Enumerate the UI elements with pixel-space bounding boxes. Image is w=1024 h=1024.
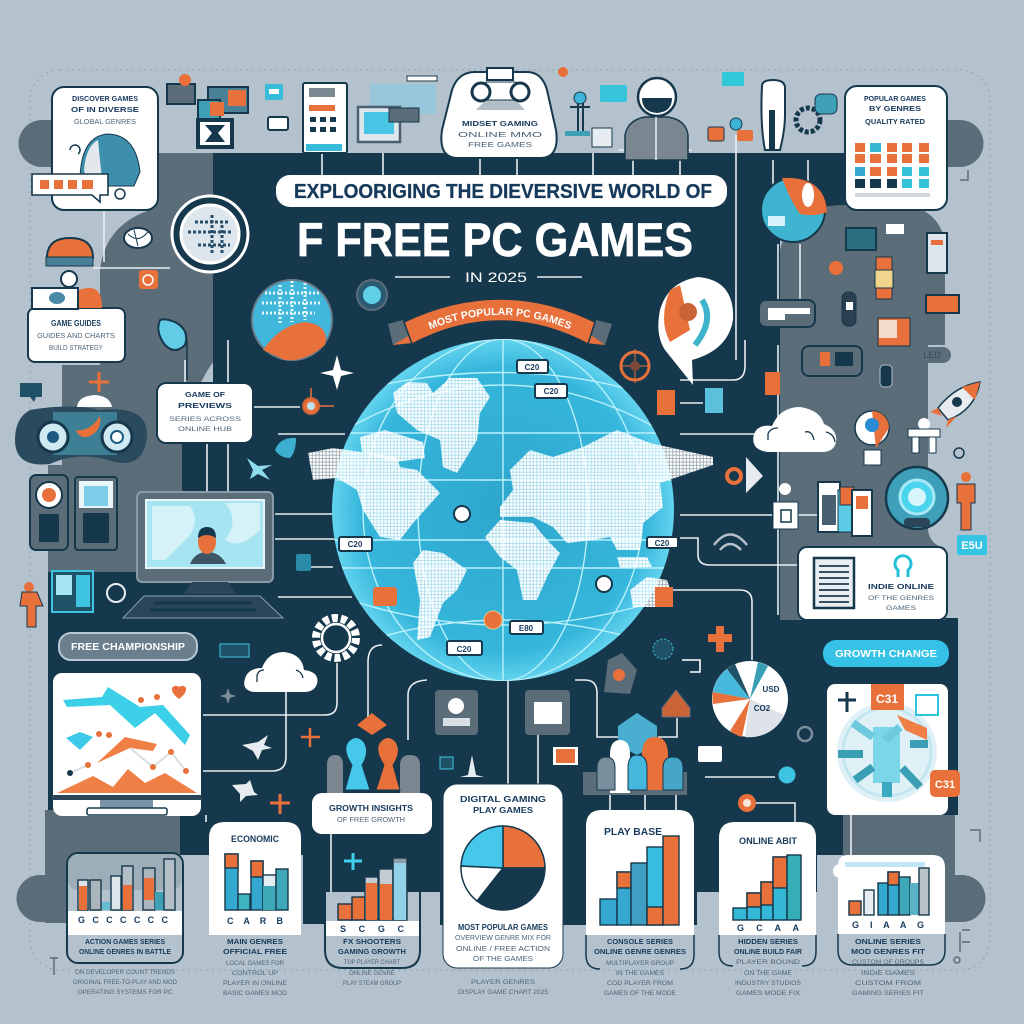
panel: bar chart 2: ECONOMIC	[231, 834, 279, 844]
caption 3	[343, 970, 401, 987]
panel: genre grid card	[845, 86, 947, 210]
panel: genre grid card: BY GENRES	[869, 104, 921, 113]
icon: wifi	[714, 534, 747, 550]
panel: bar chart 2: MAIN GENRES	[227, 937, 283, 946]
heading: free championship	[59, 633, 197, 660]
icon: gamepad	[472, 68, 529, 110]
callout: growth insights	[312, 793, 432, 834]
caption 4	[458, 979, 548, 996]
panel: online share chart: HIDDEN SERIES	[738, 937, 798, 946]
caption 5	[604, 970, 677, 997]
pie chart: right: CO2	[754, 704, 771, 713]
icon: cyan badge top	[265, 84, 283, 100]
heading: free championship: FREE CHAMPIONSHIP	[71, 642, 185, 653]
icon: user with orange shape	[32, 271, 102, 309]
caption 3: PLAY STEAM GROUP	[343, 980, 401, 987]
icon: small pin	[880, 365, 892, 387]
icon: cyan ring	[778, 766, 796, 784]
title banner: EXPLOORIGING THE DIEVERSIVE WORLD OF	[294, 181, 712, 203]
caption 6: GAMES MODE FIX	[736, 990, 801, 997]
caption 5: IN THE GAMES	[616, 970, 665, 977]
map markers: C20	[544, 387, 559, 396]
badge: cyan label	[957, 535, 987, 555]
caption 6: ON THE GAME	[744, 970, 793, 977]
globe with world map	[308, 339, 713, 681]
connector lines	[93, 135, 851, 892]
icon: right slate cluster	[829, 224, 959, 363]
panel: pie chart card: OVERVIEW GENRE MIX FOR	[455, 935, 551, 942]
panel: player base chart: ONLINE GENRE GENRES	[594, 947, 686, 956]
caption 7: CUSTOM FROM	[855, 980, 921, 987]
panel: bar chart 3: S C G C	[340, 924, 404, 934]
chart: growth radial card: C31	[876, 692, 898, 706]
pie chart: right: USD	[763, 685, 780, 694]
panel: game guides card: GAME GUIDES	[51, 319, 102, 328]
icon: standing figure	[957, 472, 975, 530]
icon: speaker cone	[727, 457, 763, 493]
icon: dark tag	[20, 383, 42, 402]
icon: right pie circle	[761, 178, 827, 242]
icon: rocket	[930, 382, 980, 428]
map markers: E80	[519, 624, 534, 633]
icon: magnifier lens	[172, 196, 248, 272]
panel: document card	[798, 547, 947, 620]
panel: chart 7: CUSTOM OF GROUPS	[852, 959, 925, 966]
icon: mini globe	[252, 280, 332, 360]
icon: gear and chat	[796, 94, 837, 132]
panel: bar chart 2	[209, 822, 301, 963]
chart: growth radial card	[827, 684, 960, 815]
icon: plane white 2	[232, 780, 258, 802]
panel: pie chart card: PLAY GAMES	[473, 806, 534, 815]
panel: player base chart: PLAY BASE	[604, 827, 662, 838]
panel: controller badge: FREE GAMES	[468, 142, 532, 149]
panel: bar chart 3	[325, 858, 420, 968]
panel: discover card: OF IN DIVERSE	[71, 105, 139, 114]
icon: orange app tile	[139, 270, 158, 289]
icon: orange compass	[620, 349, 650, 383]
panel: online share chart: PLAYER BOUND	[736, 959, 800, 966]
icon: blue balloon	[158, 319, 187, 380]
icon: cyan blob and plane	[247, 438, 311, 571]
panel: multiplayer card: GAME OF	[185, 390, 225, 399]
caption 1: OPERATING SYSTEMS FOR PC	[78, 989, 173, 996]
panel: discover card: GLOBAL GENRES	[74, 119, 136, 126]
panel: game guides card: GUIDES AND CHARTS	[37, 333, 115, 340]
caption 6	[735, 970, 802, 997]
icon: orange plus 3	[270, 794, 290, 814]
icon: right slate cluster: LED	[923, 350, 941, 360]
icon: desk robot	[908, 418, 964, 458]
icon: console device	[802, 346, 862, 376]
icon: app tiles	[435, 690, 578, 777]
icon: cloud white	[244, 652, 317, 692]
icon: cloud	[753, 407, 836, 452]
icon: plane white	[242, 735, 272, 760]
panel: controller badge	[441, 68, 557, 158]
panel: multiplayer card: ONLINE HUB	[178, 426, 232, 433]
panel: bar chart 1: ONLINE GENRES IN BATTLE	[79, 947, 171, 956]
panel: bar chart 1: G C C C C C C	[78, 915, 168, 925]
caption 2: PLAYER IN ONLINE	[223, 980, 288, 987]
panel: player base chart: CONSOLE SERIES	[607, 937, 673, 946]
icon: white keycap	[759, 300, 815, 327]
map markers: C20	[655, 539, 670, 548]
icon: small cyan tile	[220, 644, 249, 657]
icon: game world	[70, 134, 140, 199]
panel: bar chart 2: OFFICIAL FREE	[223, 947, 287, 956]
panel: bar chart 3: FX SHOOTERS	[343, 937, 401, 946]
heat grid	[855, 143, 930, 197]
panel: pie chart card	[443, 784, 563, 968]
icon: brain	[124, 228, 152, 248]
ribbon: MOST POPULAR PC GAMES	[428, 308, 572, 330]
heading: growth change	[823, 640, 949, 667]
panel: online share chart: G C A A	[737, 923, 800, 933]
icon: crowd left	[327, 713, 420, 793]
pie chart	[461, 826, 545, 910]
panel: pie chart card: MOST POPULAR GAMES	[458, 923, 549, 932]
panel: pie chart card: DIGITAL GAMING	[460, 795, 546, 804]
icon: robot head	[268, 117, 288, 130]
panel: controller badge: MIDSET GAMING	[462, 119, 538, 128]
icon: blue gear	[357, 280, 387, 310]
panel: document card: GAMES	[886, 605, 917, 612]
icon: orange target	[738, 794, 795, 822]
panel: game guides card	[28, 308, 125, 362]
icon: building stack	[818, 482, 872, 536]
panel: online share chart: ONLINE BUILD FAIR	[734, 947, 803, 956]
map markers	[339, 360, 678, 655]
panel: multiplayer card: PREVIEWS	[178, 401, 232, 410]
panel: multiplayer card	[157, 383, 253, 443]
panel: online share chart: ONLINE ABIT	[739, 836, 798, 846]
map markers: C20	[457, 645, 472, 654]
caption 4: DISPLAY GAME CHART 2025	[458, 989, 548, 996]
caption 1	[73, 969, 177, 996]
icon: small stick figures	[558, 67, 627, 147]
icon: map pin	[855, 411, 889, 465]
panel: bar chart 3: GAMING GROWTH	[338, 947, 406, 956]
ribbon	[388, 300, 612, 345]
panel: online share chart	[719, 822, 816, 966]
main title: F FREE PC GAMES	[297, 213, 693, 266]
caption 2	[223, 960, 288, 997]
icon: calculator	[303, 83, 347, 153]
caption 5: GAMES OF THE MODE	[604, 990, 677, 997]
icon: desktop monitor and keyboard	[123, 492, 283, 618]
icon: orange plus 2	[301, 728, 320, 747]
panel: player base chart: MULTIPLAYER GROUP	[606, 960, 674, 967]
icon: person white	[761, 80, 785, 150]
caption 3: ONLINE GENRE	[349, 970, 396, 977]
icon: speech bubble head	[658, 277, 733, 385]
map markers: C20	[525, 363, 540, 372]
panel: bar chart 1: ACTION GAMES SERIES	[85, 937, 165, 946]
panel: chart 7: G I A A G	[852, 920, 924, 930]
panel: chart 7	[833, 855, 945, 966]
caption 5: COD PLAYER FROM	[607, 980, 673, 987]
caption 1: ON DEVELOPER COUNT TRENDS	[75, 969, 176, 976]
panel: discover card: DISCOVER GAMES	[72, 94, 138, 103]
panel: document card: OF THE GENRES	[868, 595, 935, 602]
icon: gamepad	[15, 395, 147, 464]
panel: pie chart card: ONLINE / FREE ACTION	[456, 946, 550, 953]
callout: growth insights: OF FREE GROWTH	[337, 817, 405, 824]
icon: corner marks	[50, 170, 980, 975]
icon: sparkle small	[220, 688, 236, 704]
panel: genre grid card: POPULAR GAMES	[864, 94, 926, 103]
panel: discover card	[32, 87, 158, 210]
panel: genre grid card: QUALITY RATED	[865, 119, 925, 126]
icon: figure left	[20, 582, 43, 627]
icon: gear white	[316, 618, 356, 658]
pie chart: right	[712, 661, 788, 737]
caption 1: ORIGINAL FREE-TO-PLAY AND MOD	[73, 979, 177, 986]
caption 7	[852, 970, 924, 997]
panel: pie chart card: OF THE GAMES	[473, 956, 533, 963]
subtitle: IN 2025	[465, 269, 527, 285]
badge: cyan label: E5U	[961, 540, 983, 552]
icon: cyan plus	[344, 853, 362, 870]
icon: person with helmet	[625, 78, 688, 160]
caption 2: CONTROL UP	[232, 970, 278, 977]
icon: person at desk	[773, 483, 798, 529]
icon: orange pin mid	[657, 372, 780, 415]
panel: multiplayer card: SERIES ACROSS	[169, 416, 242, 423]
rating bar	[32, 174, 108, 202]
icon: glowing ring	[886, 467, 948, 529]
chart: growth radial card: C31	[935, 779, 955, 791]
panel: bar chart 1	[67, 853, 183, 963]
chart: trend monitor	[52, 673, 202, 816]
panel: bar chart 2: C A R B	[227, 916, 284, 926]
icon: orange dome	[46, 238, 93, 266]
map markers: C20	[348, 540, 363, 549]
caption 7: INDIE GAMES	[861, 970, 916, 977]
icon: orange plus	[89, 372, 109, 392]
icon: cross, splat and tag	[604, 626, 812, 762]
icon: top left screens	[167, 74, 248, 147]
panel: game guides card: BUILD STRATEGY	[49, 345, 103, 352]
heading: growth change: GROWTH CHANGE	[835, 649, 937, 660]
icon: blue monitor	[358, 76, 437, 142]
icon: crowd right	[583, 713, 687, 795]
caption 7: GAMING SERIES FIT	[852, 990, 924, 997]
icon: orange tag and pin	[708, 72, 753, 141]
panel: controller badge: ONLINE MMO	[458, 132, 543, 139]
callout: growth insights: GROWTH INSIGHTS	[329, 804, 414, 813]
panel: document card: INDIE ONLINE	[868, 582, 934, 591]
caption 2: LOCAL GAMES FOR	[226, 960, 284, 967]
icon: devices	[30, 475, 117, 550]
caption 4: PLAYER GENRES	[471, 979, 536, 986]
caption 2: BASIC GAMES MOD	[223, 990, 287, 997]
title banner	[276, 175, 727, 207]
panel: chart 7: MOD GENRES FIT	[851, 947, 925, 956]
panel: player base chart	[586, 810, 694, 969]
icon: cabinets lower left	[52, 571, 125, 612]
panel: chart 7: ONLINE SERIES	[855, 937, 921, 946]
panel: bar chart 3: TOP PLAYER CHART	[344, 960, 400, 966]
icon: orange locator	[303, 388, 334, 414]
caption 6: INDUSTRY STUDIOS	[735, 980, 802, 987]
icon: sparkle	[320, 355, 354, 390]
